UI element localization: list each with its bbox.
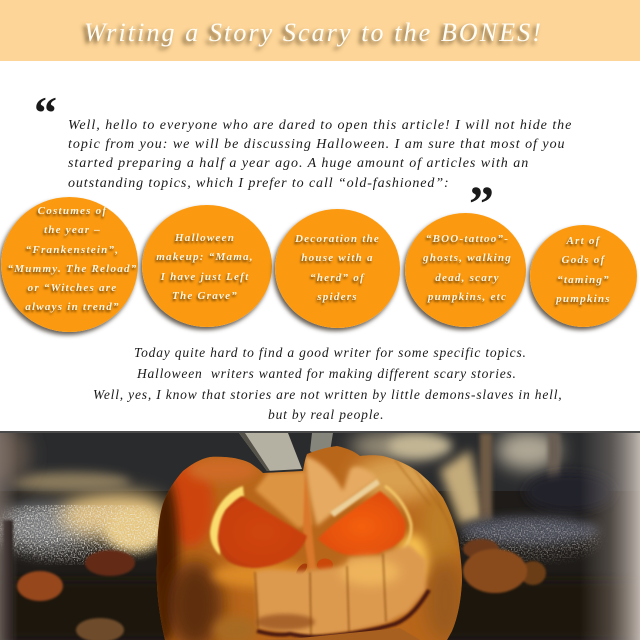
photo: carved pumpkin in dark forest <box>0 431 640 640</box>
intro paragraph: started preparing a half a year ago. A huge amount of articles with an <box>68 156 529 171</box>
pumpkin body <box>150 440 470 640</box>
circle: makeup: I have just Left <box>161 271 249 283</box>
circle: taming pumpkins: “taming” <box>557 274 610 286</box>
closing paragraph: Today quite hard to find a good writer for some specific topics. <box>134 345 527 360</box>
circle: costumes: “Mummy. The Reload” <box>8 263 137 275</box>
circle: decoration: spiders <box>317 291 358 303</box>
circle: costumes: “Frankenstein”, <box>26 244 119 256</box>
circle: costumes: or “Witches are <box>28 282 117 294</box>
nose bridge and brow <box>303 456 380 570</box>
forest background <box>0 425 640 640</box>
circle: tattoo: ghosts, walking <box>423 252 512 264</box>
circle: costumes: Costumes of <box>38 205 107 217</box>
circle: tattoo <box>405 213 526 327</box>
teeth <box>255 545 429 640</box>
circle: tattoo: pumpkins, etc <box>428 291 507 303</box>
circle: makeup <box>142 205 272 327</box>
circle: costumes: the year – <box>44 224 101 236</box>
intro paragraph <box>68 118 572 191</box>
circle: taming pumpkins <box>530 225 637 327</box>
eyes <box>210 486 411 568</box>
circle: tattoo: dead, scary <box>435 272 500 284</box>
circle: decoration: house with a <box>301 252 374 264</box>
circle: makeup: Halloween <box>175 232 235 244</box>
circle: makeup: The Grave” <box>172 290 238 302</box>
circle: costumes <box>1 197 138 332</box>
closing paragraph: Halloween writers wanted for making different scary stories. <box>137 366 517 381</box>
circle: tattoo: “BOO-tattoo”- <box>426 233 509 245</box>
circle: taming pumpkins: Gods of <box>562 254 605 266</box>
circle: taming pumpkins: pumpkins <box>556 293 611 305</box>
title: Writing a Story Scary to the BONES! <box>84 18 543 47</box>
circle: taming pumpkins: Art of <box>566 235 601 247</box>
circle: costumes: always in trend” <box>25 301 120 313</box>
opening quote mark: “ <box>34 87 57 138</box>
intro paragraph: outstanding topics, which I prefer to call “old-fashioned”: <box>68 176 450 191</box>
intro paragraph: Well, hello to everyone who are dared to open this article! I will not hide the <box>68 118 572 133</box>
header banner <box>0 0 640 61</box>
nose <box>296 558 333 576</box>
closing paragraph: but by real people. <box>268 407 384 422</box>
blades <box>239 433 333 471</box>
circle: decoration <box>275 209 400 328</box>
circle: makeup: makeup: “Mama, <box>156 251 254 263</box>
circle: decoration: “herd” of <box>310 272 365 284</box>
closing quote mark: ” <box>469 175 494 231</box>
closing paragraph: Well, yes, I know that stories are not written by little demons-slaves in hell, <box>93 387 562 402</box>
circle: decoration: Decoration the <box>295 233 380 245</box>
small pumpkins <box>17 539 546 640</box>
intro paragraph: topic from you: we will be discussing Halloween. I am sure that most of you <box>68 137 566 152</box>
closing paragraph <box>93 345 562 422</box>
